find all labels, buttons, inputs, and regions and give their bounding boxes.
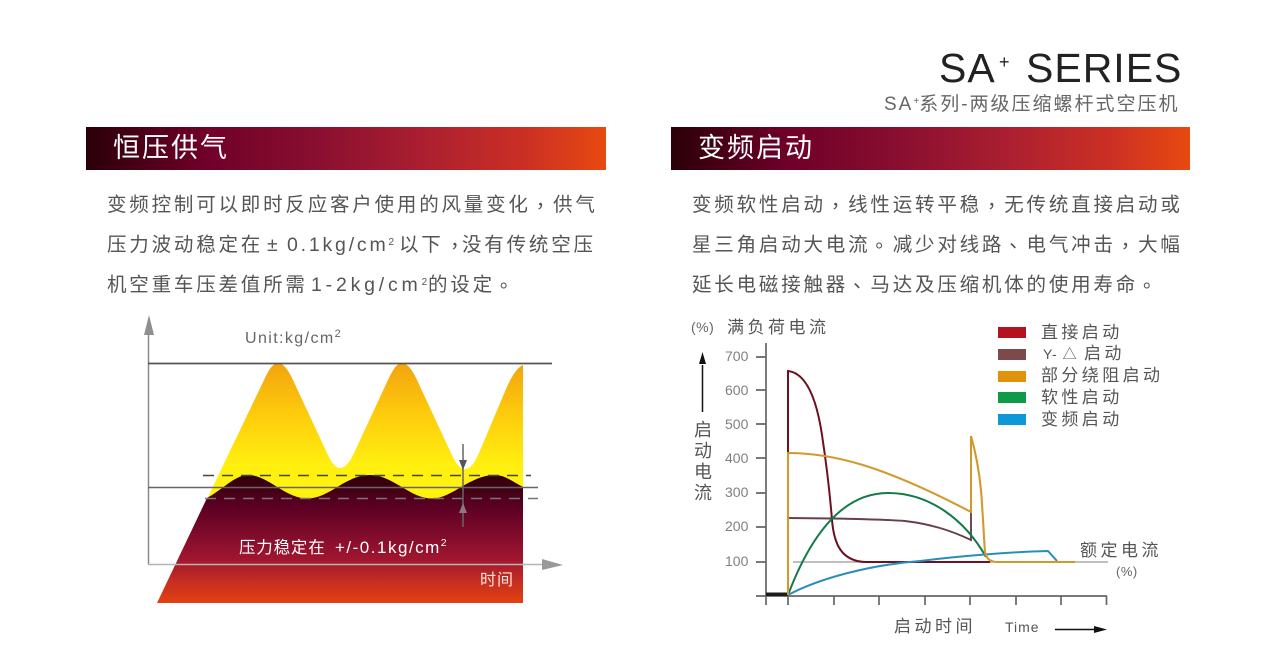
y axis values: 300 bbox=[725, 484, 749, 500]
text block: constant pressure: 没有传统空压 bbox=[462, 234, 596, 256]
legend: direct bbox=[998, 323, 1123, 342]
lower dashed line bbox=[205, 498, 538, 500]
panel heading: constant pressure bbox=[86, 127, 606, 170]
y axis bbox=[144, 315, 154, 564]
legend: soft: 软性启动 bbox=[1041, 388, 1123, 407]
title: SERIES bbox=[1026, 45, 1182, 91]
text block: variable frequency start bbox=[692, 190, 1183, 296]
panel heading: variable frequency start: 变频启动 bbox=[698, 133, 814, 163]
chart caption: +/-0.1kg/cm bbox=[335, 538, 441, 557]
unit label: Unit:kg/cm bbox=[245, 330, 335, 347]
target pressure line bbox=[148, 486, 538, 488]
text block: variable frequency start: 星三角启动大电流 。减少对线路 、电气冲击 ，大幅 bbox=[692, 230, 1183, 256]
text block: variable frequency start: 变频软性启动 ，线性运转平稳 ，无传统直接启动或 bbox=[692, 190, 1183, 216]
curve: partial winding start bbox=[788, 436, 1075, 595]
text block: constant pressure: 压力波动稳定在 bbox=[107, 234, 263, 256]
y axis values: 700 bbox=[725, 348, 749, 364]
curve: direct start bbox=[788, 371, 990, 595]
y axis values bbox=[725, 348, 749, 569]
text block: constant pressure: 0.1kg/cm2 bbox=[287, 234, 395, 256]
upper limit line bbox=[148, 362, 552, 364]
subtitle: SA+系列-两级压缩螺杆式空压机 bbox=[884, 94, 1180, 115]
y axis values: 200 bbox=[725, 518, 749, 534]
legend: variable frequency bbox=[998, 410, 1123, 429]
y axis values: 500 bbox=[725, 416, 749, 432]
vertical axis label bbox=[694, 420, 712, 503]
idle baseline bbox=[766, 592, 788, 596]
text block: variable frequency start: 延长电磁接触器 、马达及压缩机体的使用寿命 。 bbox=[692, 270, 1165, 296]
text block: constant pressure: 机空重车压差值所需 bbox=[107, 274, 308, 296]
text block: constant pressure: 变频控制可以即时反应客户使用的风量变化 ，供气 bbox=[107, 190, 598, 216]
legend: partial winding: 部分绕阻启动 bbox=[1041, 366, 1163, 385]
legend bbox=[998, 323, 1163, 429]
title: SA bbox=[939, 45, 996, 91]
time arrow bbox=[1055, 626, 1107, 633]
y axis values: 400 bbox=[725, 450, 749, 466]
chart caption bbox=[239, 537, 448, 557]
panel heading: variable frequency start bbox=[671, 127, 1190, 170]
curve: Y-delta start bbox=[788, 512, 971, 540]
text block: constant pressure bbox=[107, 190, 598, 296]
range arrows bbox=[459, 444, 467, 527]
upper dashed line bbox=[203, 474, 531, 476]
vertical axis label: 动 bbox=[694, 441, 712, 461]
y axis title: (%) bbox=[691, 319, 714, 335]
curve: soft start bbox=[788, 493, 986, 595]
curve: variable frequency start bbox=[788, 551, 1057, 595]
chart axes bbox=[756, 343, 1107, 605]
vertical axis label: 流 bbox=[694, 483, 712, 503]
text block: constant pressure: ， bbox=[445, 236, 467, 258]
chart: starting current bbox=[691, 318, 1163, 636]
legend: Y-delta: 启动 bbox=[1084, 344, 1125, 363]
title: + bbox=[999, 52, 1011, 72]
legend: variable frequency: 变频启动 bbox=[1041, 410, 1123, 429]
y axis values: 100 bbox=[725, 553, 749, 569]
legend: Y-delta bbox=[998, 344, 1125, 363]
title bbox=[939, 45, 1182, 91]
time axis bbox=[148, 559, 563, 570]
vertical axis label: 启 bbox=[694, 420, 712, 440]
chart caption: 2 bbox=[441, 537, 448, 549]
chart caption: 压力稳定在 bbox=[239, 538, 326, 557]
vertical axis label: 电 bbox=[694, 462, 712, 482]
text block: constant pressure: 以下 bbox=[399, 234, 444, 256]
text block: constant pressure: 1-2kg/cm2 bbox=[311, 274, 428, 296]
yellow pressure wave bbox=[207, 363, 523, 500]
time label: 时间 bbox=[480, 571, 514, 589]
legend: soft bbox=[998, 388, 1123, 407]
legend: direct: 直接启动 bbox=[1041, 323, 1123, 342]
rated percent label: (%) bbox=[1116, 564, 1138, 579]
y axis values: 600 bbox=[725, 382, 749, 398]
text block: constant pressure: ± bbox=[267, 234, 281, 256]
time label: Time bbox=[1005, 619, 1040, 635]
rated current label: 额定电流 bbox=[1080, 541, 1162, 560]
unit label: 2 bbox=[335, 328, 342, 340]
chart: constant pressure wave bbox=[144, 315, 563, 603]
dark stable pressure area bbox=[157, 475, 523, 603]
upward arrow bbox=[699, 352, 706, 412]
text block: constant pressure: 的设定 。 bbox=[428, 270, 522, 296]
legend: Y-delta: Y- △ bbox=[1043, 346, 1078, 362]
x axis title: 启动时间 bbox=[894, 617, 976, 636]
y axis title: 满负荷电流 bbox=[727, 318, 830, 337]
panel heading: constant pressure: 恒压供气 bbox=[113, 133, 229, 163]
rated current line bbox=[793, 561, 1108, 563]
